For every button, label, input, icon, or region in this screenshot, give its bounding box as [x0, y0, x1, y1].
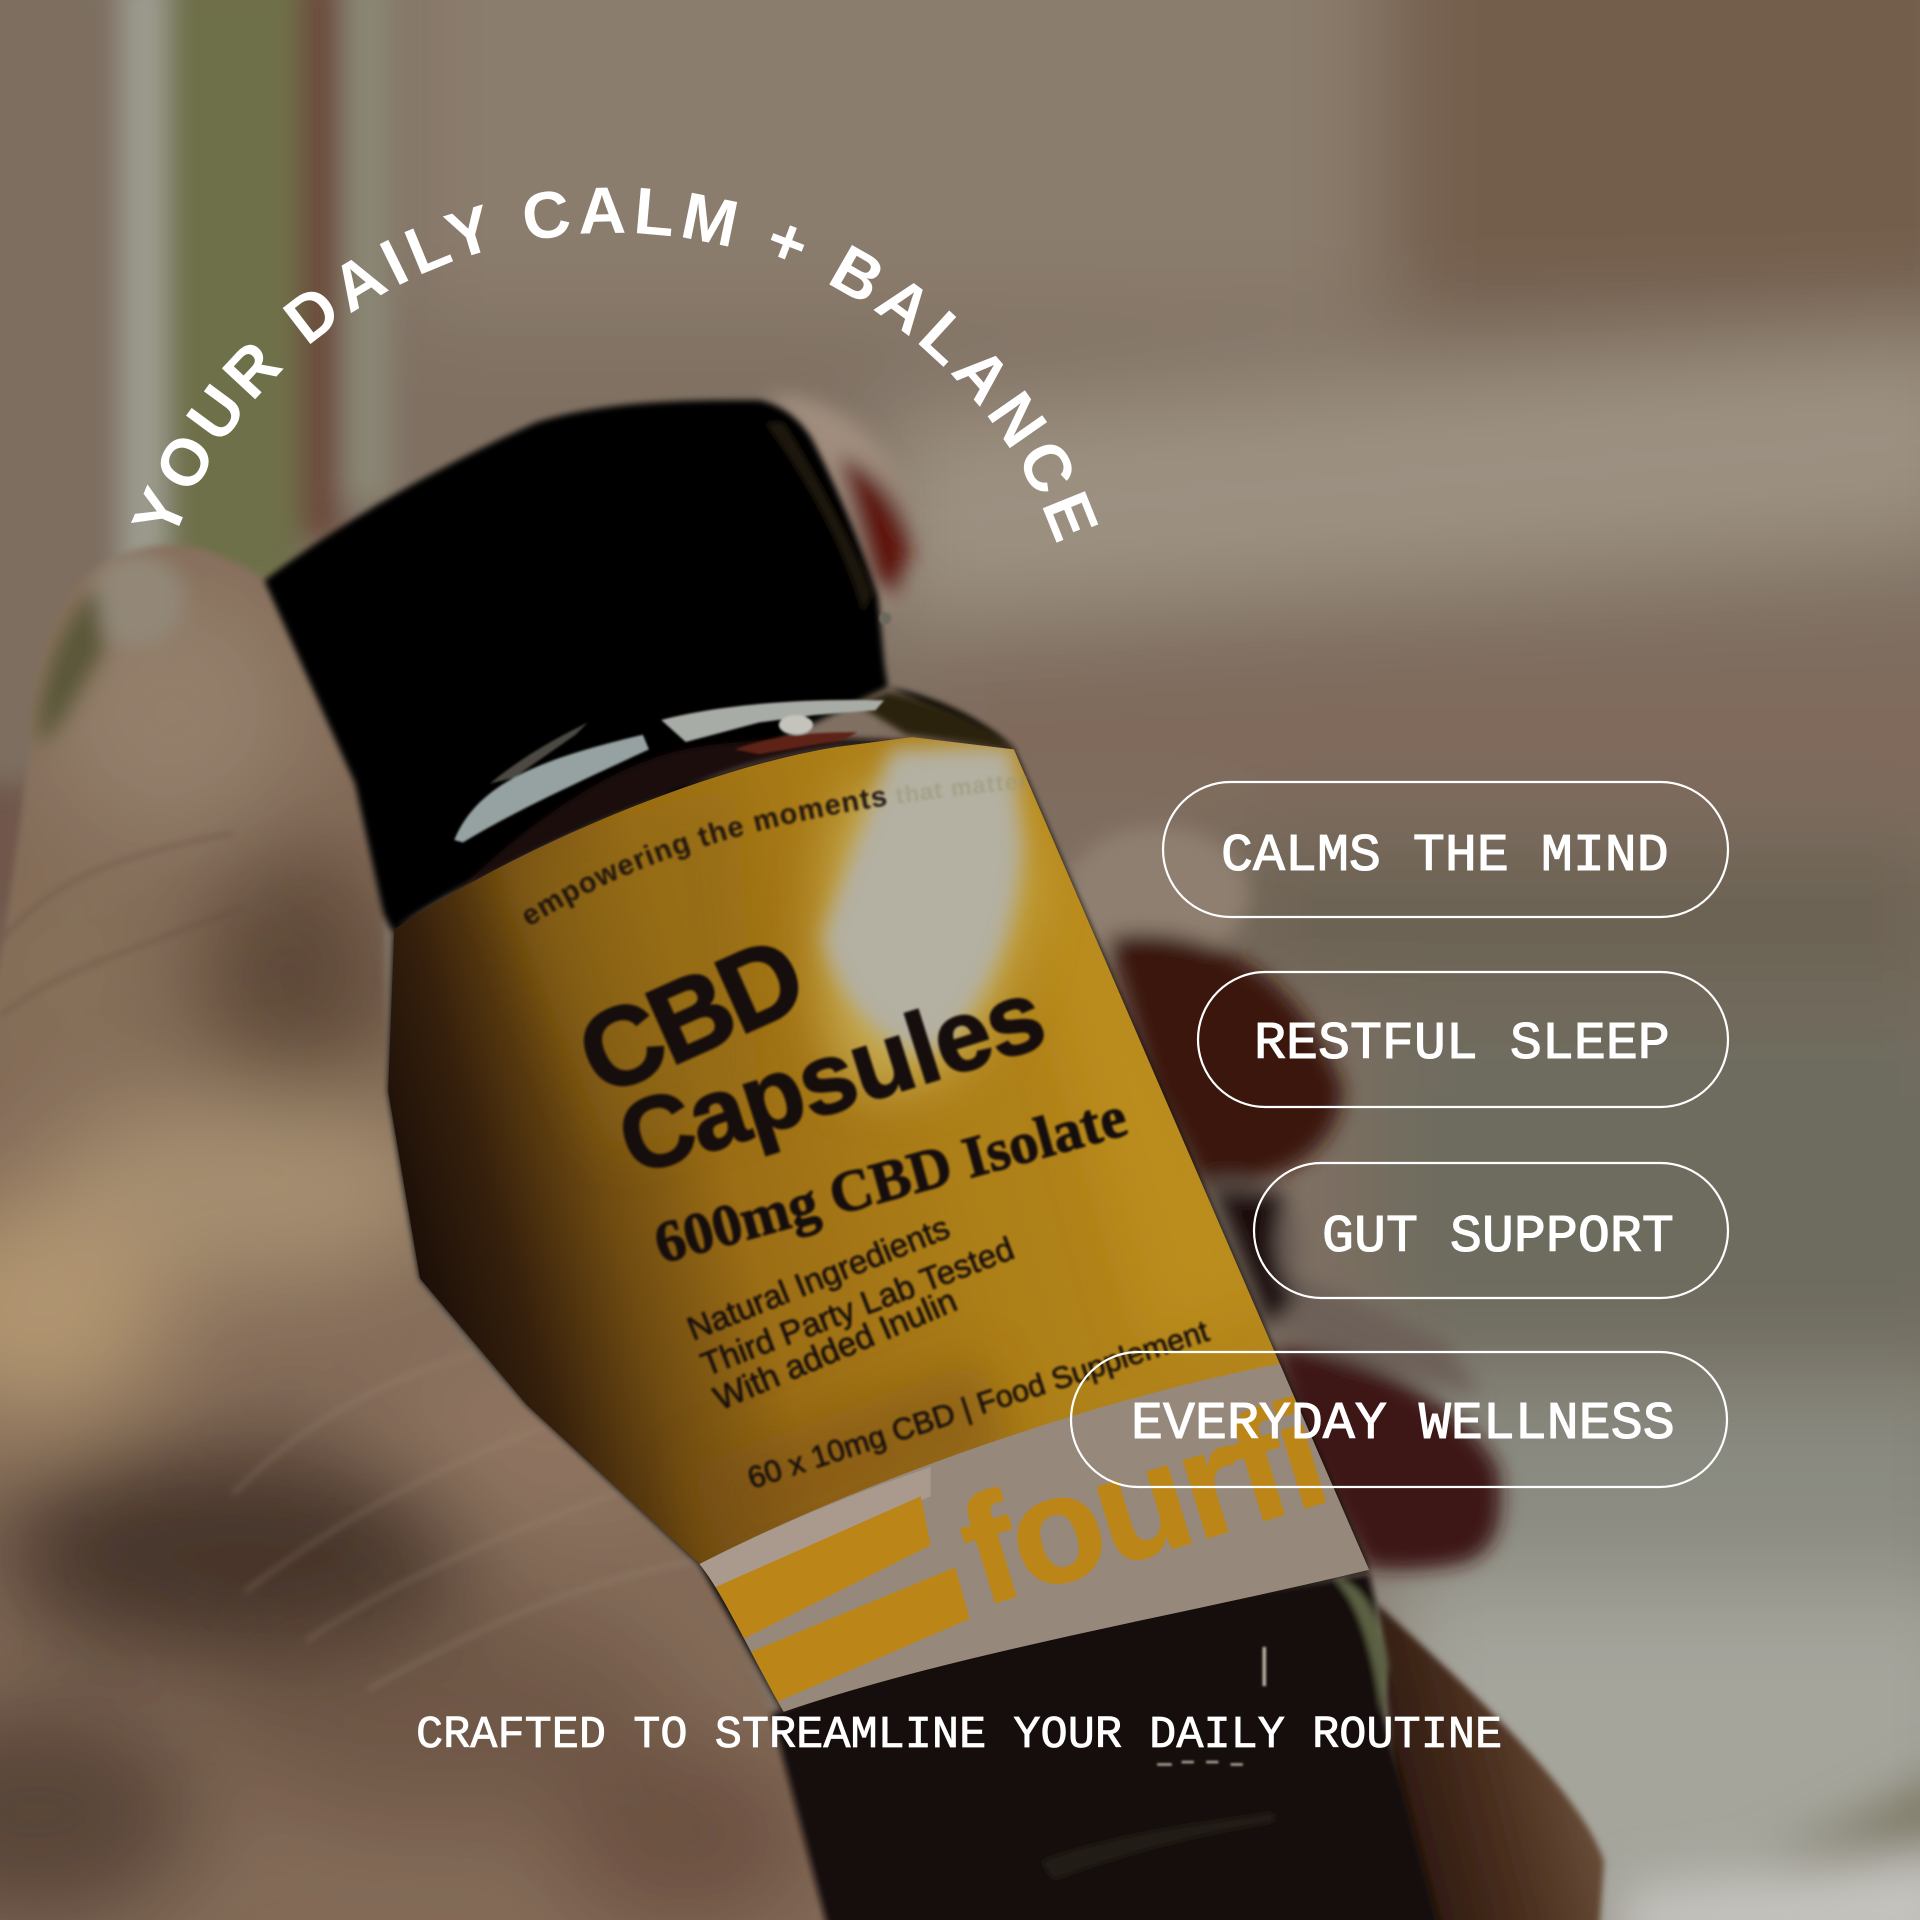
benefit pill: restful sleep: RESTFUL SLEEP [1254, 1015, 1670, 1075]
benefit pill: calms the mind [1163, 782, 1728, 917]
hand and thumb [0, 514, 857, 1920]
benefit pill: gut support [1254, 1163, 1728, 1298]
logo wordmark: fourfive [942, 1322, 1496, 1638]
light highlight on label [821, 747, 1035, 1091]
benefit pill: everyday wellness [1071, 1352, 1727, 1487]
tagline: empowering the moments that matter [522, 776, 1028, 926]
label lower band [693, 1362, 1378, 1712]
label text: Third Party Lab Tested [696, 1230, 1019, 1384]
strength: 600mg CBD Isolate [647, 1084, 1133, 1276]
benefit pill: everyday wellness: EVERYDAY WELLNESS [1131, 1395, 1675, 1455]
bottle reflections [454, 612, 891, 842]
bottle base [771, 1573, 1445, 1920]
bottle cap and neck [264, 400, 1369, 1712]
label text: With added Inulin [709, 1282, 963, 1418]
benefit pill: calms the mind: CALMS THE MIND [1221, 827, 1669, 887]
glass glints on base [1157, 1647, 1266, 1766]
label text: Capsules [606, 958, 1056, 1196]
dose line: 60 x 10mg CBD | Food Supplement [743, 1314, 1213, 1496]
bottle shoulder [449, 692, 1014, 900]
benefit pill: restful sleep [1198, 972, 1728, 1107]
bottle [261, 396, 1441, 1920]
label text [522, 776, 1213, 1496]
finger tips behind the bottle [765, 394, 1604, 1920]
ingredients: Natural Ingredients [682, 1209, 955, 1348]
logo bars [710, 1496, 970, 1704]
product name: CBD [561, 914, 819, 1119]
arc heading: YOUR DAILY CALM + BALANCE [131, 188, 1098, 543]
footer tagline: CRAFTED TO STREAMLINE YOUR DAILY ROUTINE [416, 1709, 1502, 1761]
product label [388, 737, 1369, 1712]
benefit pill: gut support: GUT SUPPORT [1322, 1208, 1674, 1268]
